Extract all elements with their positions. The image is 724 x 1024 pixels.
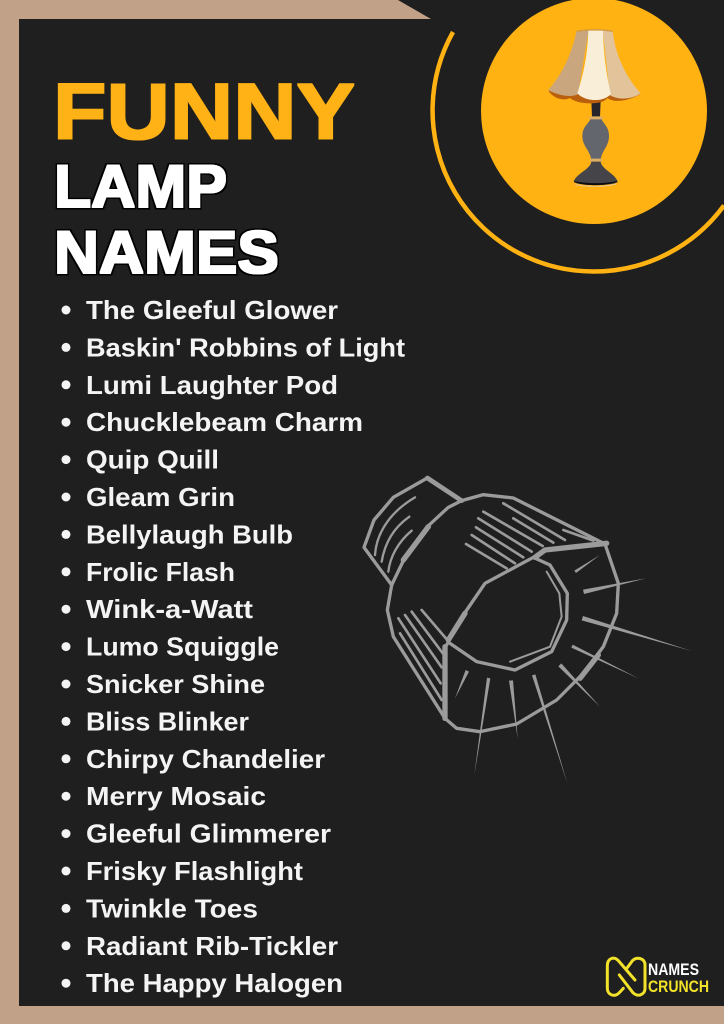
- list of lamp names: Frolic Flash: [86, 557, 235, 587]
- shade rim: [577, 30, 613, 31]
- lamp stem: [591, 100, 601, 117]
- shade scallops: [548, 90, 641, 103]
- list of lamp names: Chucklebeam Charm: [86, 407, 363, 437]
- list of lamp names: Twinkle Toes: [86, 893, 258, 923]
- heading: NAMES: NAMES: [54, 219, 279, 286]
- list of lamp names: Bellylaugh Bulb: [86, 519, 293, 549]
- list of lamp names: Quip Quill: [86, 445, 219, 475]
- shade left: [548, 31, 589, 96]
- lamp body: [582, 119, 609, 161]
- shade right: [603, 31, 641, 99]
- list of lamp names: Wink-a-Watt: [86, 594, 253, 624]
- list of lamp names: Gleam Grin: [86, 482, 235, 512]
- logo word CRUNCH: CRUNCH: [648, 977, 709, 996]
- logo word NAMES: NAMES: [648, 960, 699, 979]
- icon: table lamp: [548, 30, 641, 186]
- list of lamp names: Lumi Laughter Pod: [86, 370, 338, 400]
- list bullets: [62, 306, 70, 988]
- heading: FUNNY: FUNNY: [53, 66, 355, 156]
- list of lamp names: Snicker Shine: [86, 669, 265, 699]
- list of lamp names: Merry Mosaic: [86, 781, 266, 811]
- bulb front ring: [447, 557, 567, 670]
- list of lamp names: Bliss Blinker: [86, 706, 249, 736]
- list of lamp names: Lumo Squiggle: [86, 632, 279, 662]
- lamp collars: [589, 116, 603, 162]
- logo: Names Crunch: [607, 958, 709, 996]
- logo icon: [607, 958, 645, 995]
- bulb thick edge: [403, 527, 607, 718]
- list of lamp names: Radiant Rib-Tickler: [86, 931, 338, 961]
- socket ridges: [375, 497, 415, 572]
- upper hatching: [466, 503, 593, 568]
- list of lamp names: The Happy Halogen: [86, 968, 343, 998]
- orange circle: [481, 0, 707, 224]
- bulb socket: [364, 478, 427, 585]
- list of lamp names: Chirpy Chandelier: [86, 744, 325, 774]
- shade centre: [577, 31, 611, 100]
- list of lamp names: The Gleeful Glower: [86, 295, 338, 325]
- orange arc: [433, 32, 724, 272]
- lamp foot: [574, 162, 618, 185]
- list of lamp names: [62, 295, 405, 998]
- list of lamp names: Frisky Flashlight: [86, 856, 303, 886]
- bulb outer body: [387, 495, 618, 732]
- list of lamp names: Baskin' Robbins of Light: [86, 332, 405, 362]
- icon: light bulb outline: [364, 478, 692, 783]
- lower hatching: [398, 610, 447, 700]
- list of lamp names: Gleeful Glimmerer: [86, 819, 331, 849]
- light rays: [455, 555, 692, 783]
- heading: LAMP: LAMP: [54, 153, 227, 220]
